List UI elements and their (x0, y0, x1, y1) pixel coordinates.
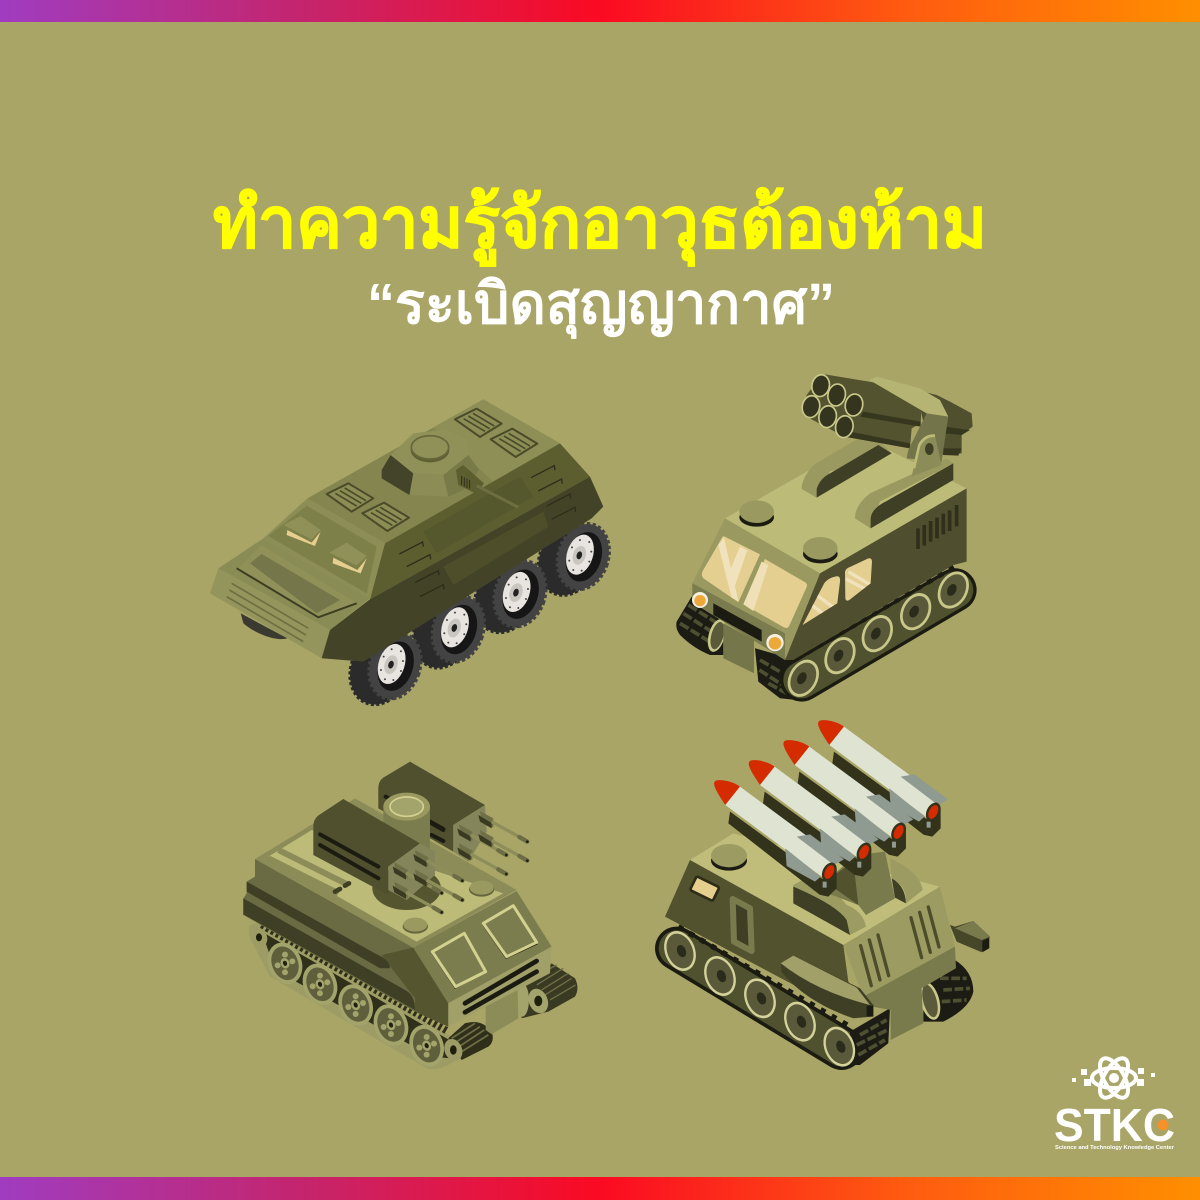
hull (210, 399, 603, 662)
driver vision ports (283, 516, 367, 573)
far track and tow hitch (916, 921, 990, 1022)
roof hatch (711, 844, 747, 871)
turret gun (456, 465, 518, 507)
roof grills (327, 409, 537, 531)
launcher ramps (802, 432, 953, 528)
side levers (399, 466, 576, 597)
near track and rollers (658, 926, 890, 1071)
fender (781, 956, 873, 1018)
side windows (803, 558, 872, 625)
roof hatches (739, 500, 838, 563)
logo orange dot (1158, 1120, 1168, 1130)
bottom gradient bar (0, 1177, 1200, 1200)
side door (733, 899, 752, 951)
roof hatches (403, 881, 494, 934)
hull (243, 798, 552, 1027)
side track and rollers (781, 566, 975, 702)
front hatches (432, 906, 538, 1012)
missile pack (714, 720, 948, 897)
wheels (341, 517, 617, 713)
top gradient bar (0, 0, 1200, 22)
far gun pod (378, 762, 529, 875)
front bar and bumper (713, 603, 762, 673)
far track (516, 963, 577, 1018)
cab body (692, 438, 967, 660)
logo tagline: Science and Technology Knowledge Center (1055, 1145, 1175, 1151)
exhaust under nose (241, 613, 287, 639)
launcher mount (869, 377, 948, 477)
front tracks (676, 597, 797, 700)
tube mount bracket (857, 442, 867, 448)
vehicle: anti-aircraft gun tank (243, 762, 577, 1072)
hull (665, 833, 956, 1040)
STKC logo (1054, 1054, 1175, 1151)
rear vent lines (861, 907, 939, 986)
logo atom mark (1072, 1054, 1155, 1102)
cab window (690, 876, 719, 901)
logo wordmark: STKC (1054, 1099, 1175, 1151)
turret cylinder (383, 793, 430, 862)
tube muzzles (800, 373, 865, 439)
subtitle: “ระเบิดสุญญากาศ” (367, 272, 835, 340)
launcher pedestal (793, 852, 923, 935)
vehicle: eight-wheeled armored personnel carrier (210, 399, 617, 713)
title: ทำความรู้จักอาวุธต้องห้าม (213, 184, 987, 267)
windshield (702, 536, 807, 628)
vehicle: tracked missile launcher (658, 720, 990, 1071)
rocket tubes (803, 374, 922, 448)
near track (248, 923, 493, 1072)
turret (382, 429, 479, 497)
vehicle: multiple rocket launcher on tracks (676, 373, 975, 702)
front bumper (486, 990, 518, 1034)
rear tube ends (917, 390, 973, 456)
turret base (372, 867, 441, 910)
near gun pod (313, 799, 464, 914)
engine vent (918, 505, 957, 549)
headlights (692, 592, 784, 651)
